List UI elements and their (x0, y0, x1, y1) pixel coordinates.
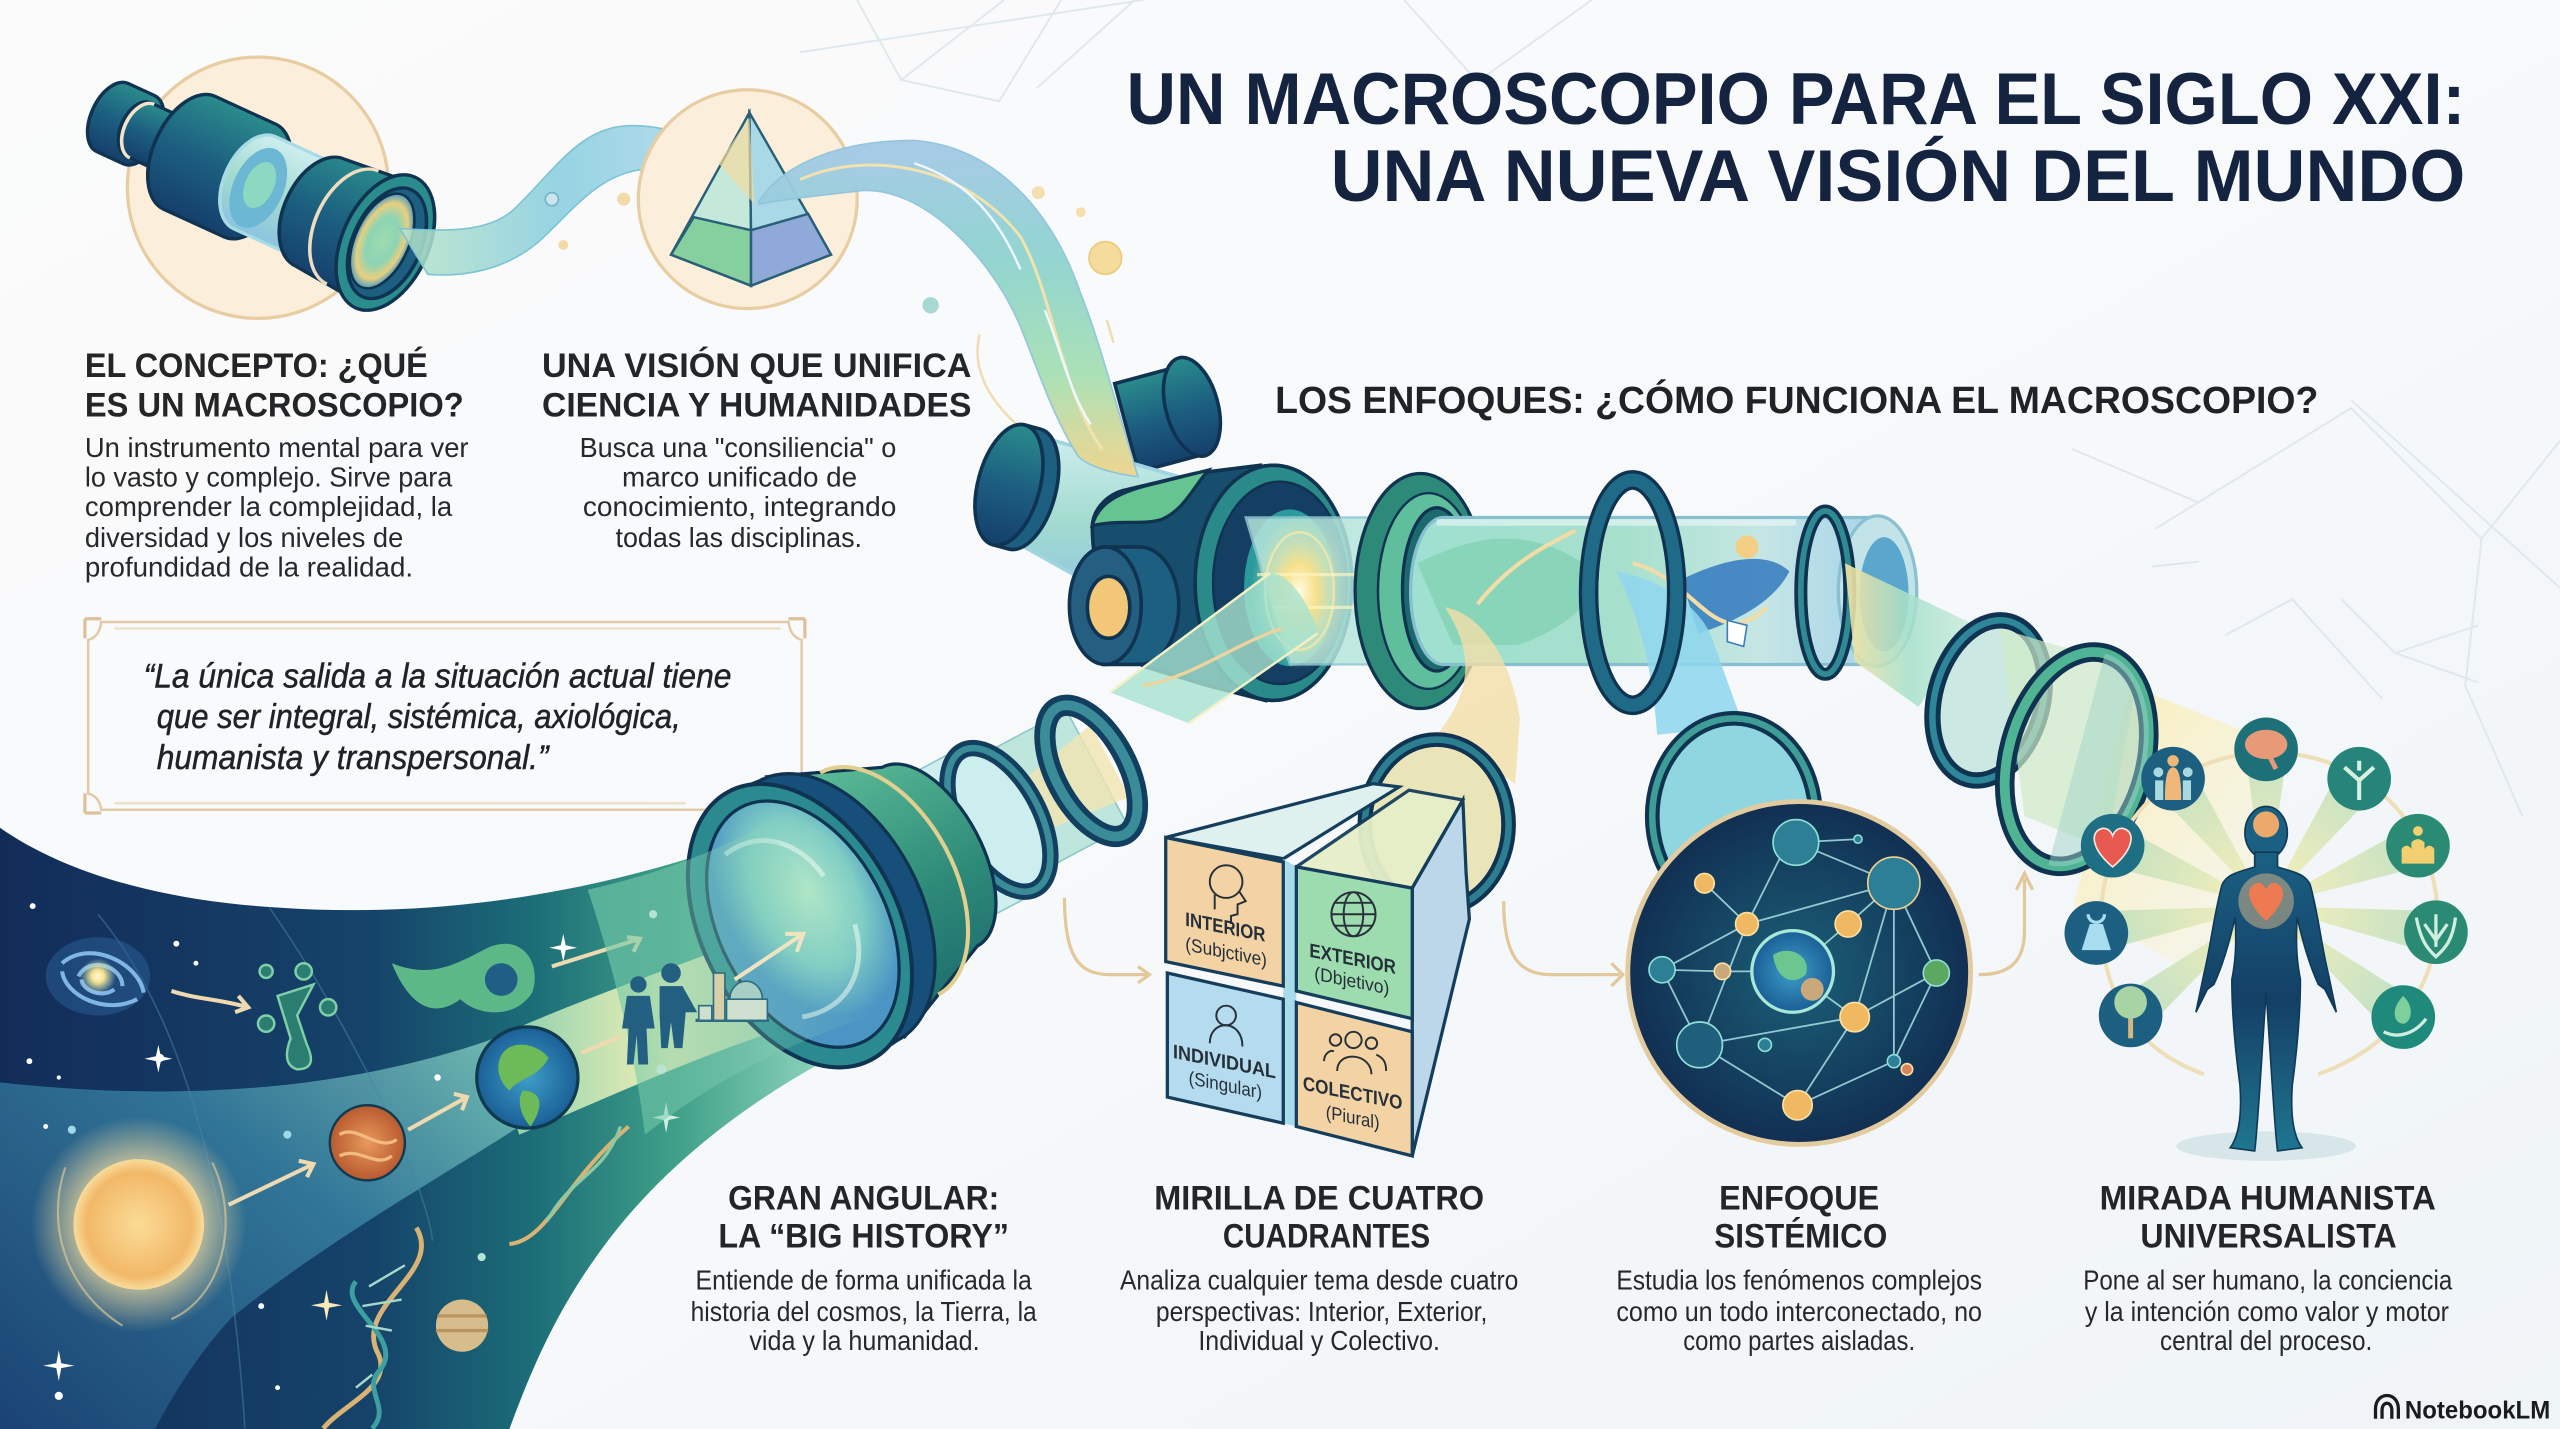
icon: quadrant lens ring (1365, 740, 1509, 909)
icon: DNA (323, 1126, 629, 1429)
section: concept (85, 345, 469, 582)
arrow: history to quadrants (1064, 898, 1149, 983)
icon: humanist rings (1915, 608, 2171, 883)
front band (729, 735, 980, 1058)
decorative particles (545, 186, 1122, 428)
quote box (85, 619, 805, 813)
icon: systemic lens ring (1652, 718, 1816, 914)
section: concept: diversidad y los niveles de (85, 522, 403, 553)
section: big history (691, 1180, 1037, 1356)
title (1127, 57, 2465, 217)
arrows along history (171, 937, 640, 1205)
icon: galaxy (46, 937, 150, 1015)
section: unifying vision: todas las disciplinas. (616, 522, 862, 553)
ring four and lip (1801, 511, 1917, 674)
icon: wide-angle lens assembly (642, 620, 1194, 1106)
quote box: humanista y transpersonal.” (157, 739, 550, 777)
section: unifying vision: conocimiento, integrando (583, 491, 896, 522)
icon: system network (1628, 802, 1971, 1144)
beam: body to wide-angle (1110, 573, 1318, 723)
quadrant: individual: INDIVIDUAL (1173, 1041, 1276, 1083)
title: UN MACROSCOPIO PARA EL SIGLO XXI: (1127, 57, 2465, 140)
icon: sun (31, 1117, 247, 1332)
section: four quadrants: Analiza cualquier tema desde cuatro (1120, 1265, 1518, 1296)
section: concept: EL CONCEPTO: ¿QUÉ (85, 345, 428, 385)
section: systemic focus: SISTÉMICO (1714, 1215, 1887, 1255)
beam: to quadrants (1437, 607, 1520, 784)
ring A (926, 732, 1072, 908)
quadrant: exterior (1296, 867, 1412, 1019)
icon: earth (477, 1027, 578, 1128)
section: concept: profundidad de la realidad. (85, 551, 413, 582)
icon: concept telescope (63, 43, 454, 326)
quadrant: interior: (Subjctive) (1185, 934, 1267, 971)
panel: cosmic wide-angle swoosh (0, 828, 849, 1429)
heading: approaches: LOS ENFOQUES: ¿CÓMO FUNCIONA EL MACROSCOPIO? (1275, 378, 2318, 422)
quote box: que ser integral, sistémica, axiológica, (157, 698, 681, 736)
section: four quadrants (1120, 1180, 1518, 1356)
section: systemic focus: como un todo interconectado, no (1616, 1296, 1982, 1327)
icon: human with radiating rays (2064, 718, 2468, 1161)
human figures and observatory (622, 934, 803, 1064)
section: systemic focus (1616, 1180, 1982, 1356)
ring B (1026, 691, 1157, 851)
quote box: “La única salida a la situación actual tiene (144, 657, 731, 695)
logo: NotebookLM: NotebookLM (2405, 1397, 2550, 1425)
section: four quadrants: Individual y Colectivo. (1198, 1325, 1440, 1356)
section: big history: LA “BIG HISTORY” (718, 1217, 1009, 1255)
icon: humanist yellow light (2073, 686, 2286, 980)
ring two (1355, 473, 1486, 709)
quadrant: collective: COLECTIVO (1303, 1073, 1402, 1115)
icon: macroscope rear barrels (963, 351, 1230, 604)
section: concept: comprender la complejidad, la (85, 491, 453, 522)
arrow: quadrants to systemic (1504, 901, 1623, 986)
section: systemic focus: como partes aisladas. (1683, 1325, 1915, 1356)
section: big history: GRAN ANGULAR: (728, 1180, 999, 1218)
main glass tube (1246, 513, 1371, 669)
ring three (1589, 480, 1677, 705)
quadrant: exterior: (Dbjetivo) (1314, 964, 1389, 1000)
icon badges (2064, 718, 2468, 1049)
green barrel (767, 702, 1045, 1036)
section: big history: Entiende de forma unificada la (696, 1265, 1032, 1296)
section: unifying vision (542, 345, 971, 553)
section: four quadrants: perspectivas: Interior, Exterior, (1156, 1296, 1487, 1327)
ribbon: telescope to prism (400, 126, 751, 275)
title: UNA NUEVA VISIÓN DEL MUNDO (1331, 134, 2465, 217)
icon: green cell (392, 944, 535, 1012)
section: unifying vision: Busca una "consiliencia" o (580, 432, 896, 463)
section: big history: vida y la humanidad. (749, 1325, 980, 1356)
section: unifying vision: UNA VISIÓN QUE UNIFICA (542, 345, 971, 385)
ribbon: prism to macroscope (759, 140, 1138, 477)
section: humanist view: MIRADA HUMANISTA (2100, 1180, 2436, 1218)
section: unifying vision: CIENCIA Y HUMANIDADES (542, 386, 971, 424)
beam: to humanist (1845, 563, 1976, 707)
quadrant: exterior: EXTERIOR (1309, 940, 1396, 979)
quadrant: interior: INTERIOR (1185, 909, 1265, 947)
section: four quadrants: MIRILLA DE CUATRO (1154, 1180, 1484, 1218)
section: systemic focus: ENFOQUE (1719, 1180, 1879, 1218)
icon: macroscope body (1092, 465, 1352, 700)
section: humanist view: Pone al ser humano, la conciencia (2083, 1265, 2453, 1296)
quadrant: individual: (Singular) (1189, 1068, 1262, 1104)
section: humanist view: central del proceso. (2160, 1325, 2372, 1356)
icon: small planet (436, 1300, 488, 1352)
quadrant: collective (1296, 1002, 1412, 1156)
section: humanist view: UNIVERSALISTA (2140, 1217, 2397, 1255)
section: concept: lo vasto y complejo. Sirve para (85, 462, 453, 493)
quadrant: individual (1167, 973, 1283, 1123)
section: concept: Un instrumento mental para ver (85, 432, 469, 463)
knob (1069, 547, 1179, 664)
section: humanist view (2083, 1180, 2453, 1356)
section: concept: ES UN MACROSCOPIO? (85, 386, 464, 424)
icon: four-quadrant prism (1166, 784, 1469, 1156)
quadrant: interior (1166, 838, 1283, 986)
section: humanist view: y la intención como valor y motor (2085, 1296, 2449, 1327)
beam: to systemic lens (1616, 571, 1744, 735)
quadrant: collective: (Piural) (1326, 1102, 1380, 1134)
section: systemic focus: Estudia los fenómenos complejos (1616, 1265, 1982, 1296)
tube contents (1411, 518, 1878, 664)
icon: prism (638, 90, 857, 309)
stars (26, 903, 680, 1400)
section: unifying vision: marco unificado de (622, 462, 857, 493)
section: four quadrants: CUADRANTES (1223, 1217, 1430, 1255)
arrow: systemic to humanist (1979, 873, 2033, 975)
icon: planet (330, 1105, 405, 1180)
beam overlay entering lens (588, 824, 882, 1135)
section: big history: historia del cosmos, la Tierra, la (691, 1296, 1037, 1327)
icon: molecules (258, 963, 336, 1069)
